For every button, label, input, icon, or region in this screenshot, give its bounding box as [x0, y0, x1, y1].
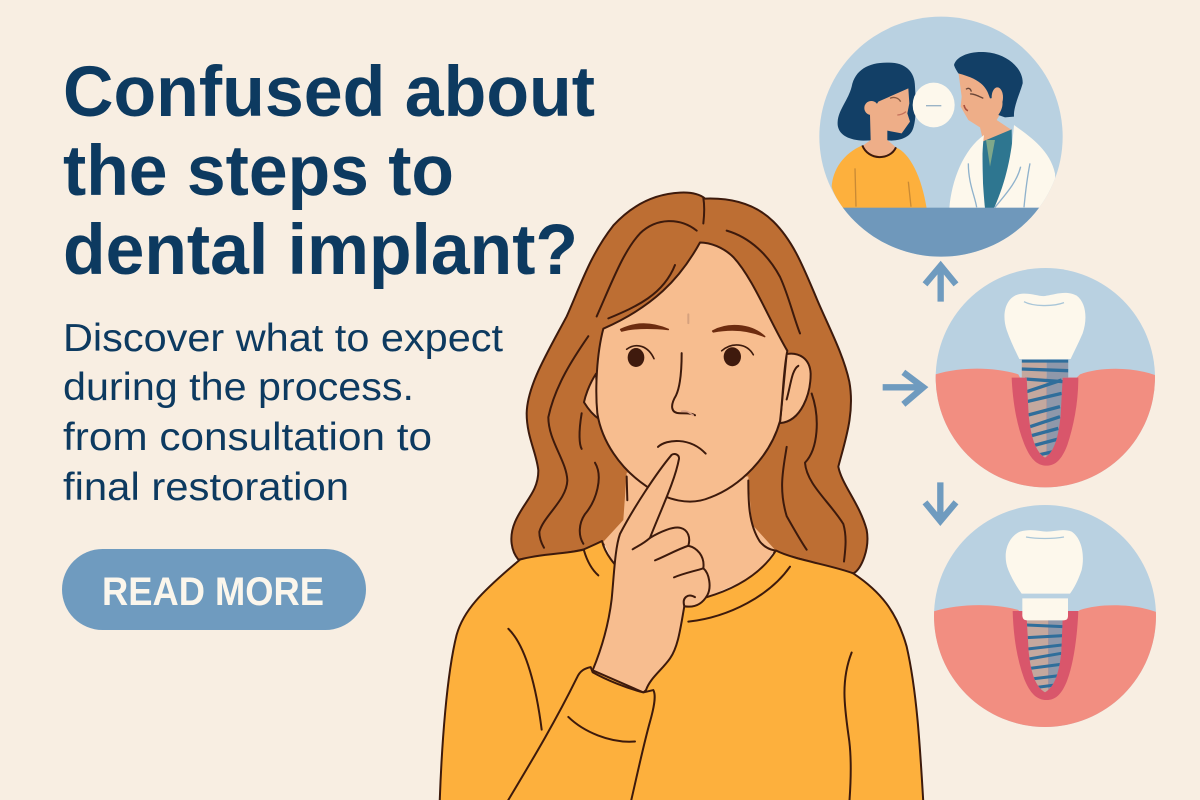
crown [1004, 293, 1085, 359]
implant circle 2 [933, 505, 1157, 728]
frown mark [687, 314, 689, 323]
title [63, 53, 595, 290]
subtitle text: final restoration [63, 466, 349, 509]
sweater [440, 541, 923, 800]
eyebrows [621, 324, 668, 331]
read more button: READ MORE [102, 570, 324, 614]
patient [832, 63, 927, 208]
mouth [658, 441, 706, 454]
implant screw [1026, 620, 1062, 692]
consultation circle [819, 16, 1063, 257]
neck [603, 473, 775, 597]
woman thinking illustration [440, 193, 923, 800]
subtitle text: during the process. [63, 366, 414, 409]
nose [672, 353, 695, 415]
gum [933, 369, 1157, 488]
socket [1012, 378, 1078, 466]
crown [1006, 530, 1083, 594]
hair strands [702, 198, 705, 223]
socket [1013, 611, 1078, 700]
implant screw [1022, 360, 1068, 458]
eyes [628, 348, 644, 367]
title: dental implant? [63, 211, 578, 290]
abutment [1022, 598, 1068, 620]
face [596, 242, 787, 502]
sleeve [507, 667, 655, 800]
title: Confused about [63, 53, 595, 132]
doctor [949, 52, 1057, 208]
collar lines [584, 550, 598, 575]
arrow right [883, 372, 923, 404]
hair [511, 193, 867, 573]
subtitle text: Discover what to expect [63, 317, 503, 360]
sweater creases [508, 629, 542, 730]
hand with finger on chin [593, 454, 710, 692]
read more button [62, 549, 366, 630]
arrows between steps [883, 265, 956, 521]
title: the steps to [63, 132, 454, 211]
arrow up [925, 265, 956, 302]
arrow down [925, 482, 956, 521]
implant circle 1 [933, 268, 1157, 488]
subtitle text: from consultation to [63, 416, 432, 459]
speech bubble [913, 83, 955, 127]
gum [933, 605, 1157, 728]
ears [584, 374, 599, 419]
subtitle text [63, 317, 503, 509]
desk [842, 208, 1040, 257]
